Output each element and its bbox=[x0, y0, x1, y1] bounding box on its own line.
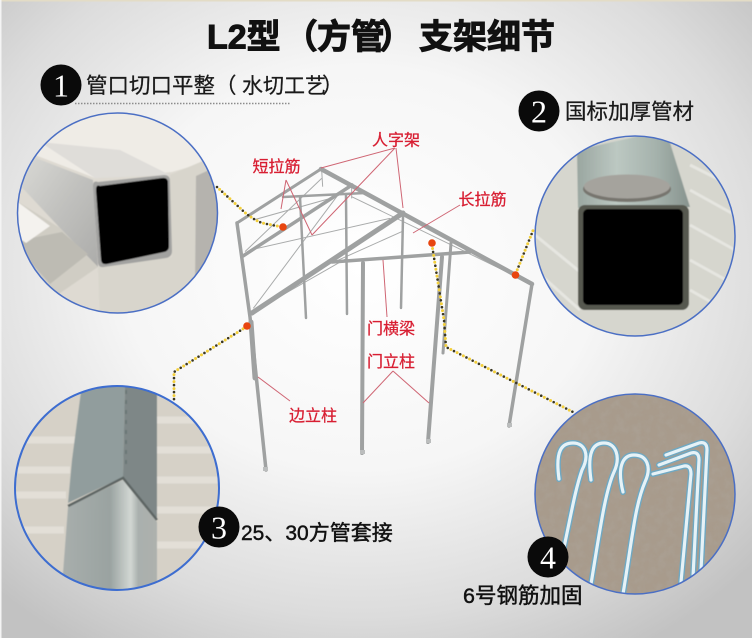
badge 1: 1 bbox=[53, 68, 69, 104]
dotted connector 1 bbox=[217, 187, 282, 227]
title: 支架细节 bbox=[419, 18, 555, 56]
label: 人字架: 人字架 bbox=[372, 132, 420, 150]
title: （ bbox=[284, 18, 318, 56]
label: 短拉筋: 短拉筋 bbox=[252, 158, 301, 176]
heading 3: 25、30方管套接 bbox=[241, 522, 393, 545]
post feet bbox=[263, 423, 512, 471]
frame rafters, beams and posts bbox=[237, 169, 532, 470]
badge 3: 3 bbox=[211, 510, 227, 546]
badge 1 bbox=[40, 64, 82, 106]
title: 方管 bbox=[317, 18, 385, 56]
connector 1 red dot bbox=[279, 223, 287, 231]
red pointer lines bbox=[258, 148, 460, 403]
heading 4: 6号钢筋加固 bbox=[463, 584, 582, 608]
heading 1: 水切工艺 bbox=[242, 75, 326, 98]
title bbox=[207, 18, 555, 56]
badge 4 bbox=[528, 536, 568, 578]
label: 门立柱: 门立柱 bbox=[367, 353, 415, 371]
badge 4: 4 bbox=[540, 540, 556, 576]
dotted connector 3 bbox=[174, 327, 246, 400]
dotted connector 2 bbox=[516, 228, 534, 273]
dotted connector 4 bbox=[432, 245, 573, 412]
heading 1: （ bbox=[215, 74, 237, 98]
heading 1: ） bbox=[322, 74, 344, 98]
photo 1: tube cut end bbox=[15, 110, 220, 320]
heading 2: 国标加厚管材 bbox=[565, 100, 694, 124]
title: L2型 bbox=[207, 18, 281, 56]
heading 1 bbox=[86, 74, 344, 98]
connector 3 red dot bbox=[243, 322, 251, 330]
label: 门横梁: 门横梁 bbox=[367, 320, 415, 338]
badge 2 bbox=[518, 90, 560, 132]
photo 2: thick tube with coin bbox=[535, 130, 735, 336]
photo 4: steel hooks and bent rods bbox=[535, 394, 735, 594]
tent frame diagram bbox=[237, 169, 532, 471]
heading 1 dotted underline bbox=[75, 102, 291, 104]
title: ） bbox=[379, 18, 413, 56]
label: 边立柱: 边立柱 bbox=[289, 407, 337, 425]
badge 3 bbox=[198, 506, 240, 548]
connector 4 red dot bbox=[428, 239, 436, 247]
photo 3: sleeved square tube joint bbox=[15, 384, 219, 590]
frame thin tie rods bbox=[245, 170, 513, 312]
connector 2 red dot bbox=[512, 271, 519, 279]
heading 1: 管口切口平整 bbox=[86, 74, 215, 98]
badge 2: 2 bbox=[531, 94, 547, 130]
label: 长拉筋: 长拉筋 bbox=[458, 191, 507, 209]
